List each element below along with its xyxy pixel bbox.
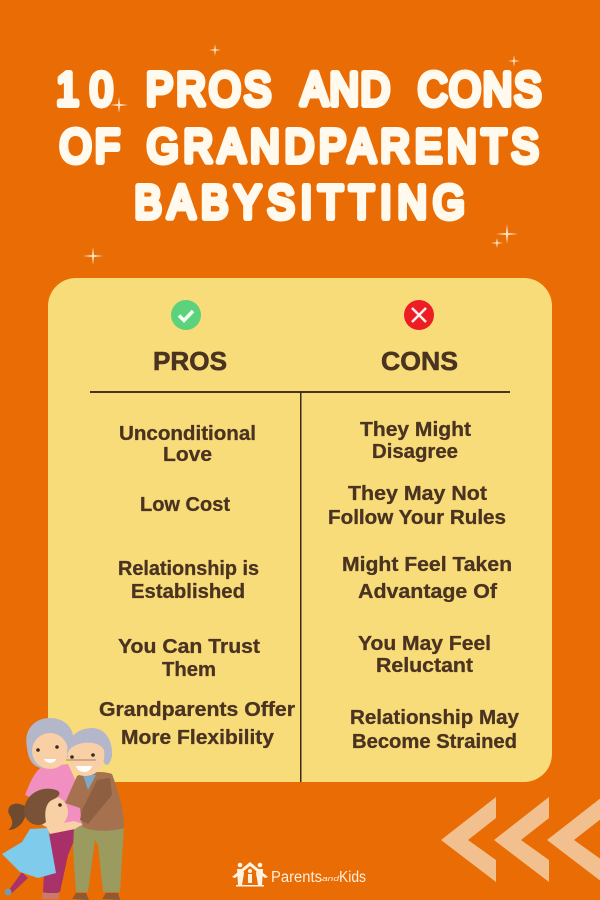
con 2: Follow Your Rules <box>328 507 506 529</box>
grandpa jacket <box>65 772 124 831</box>
con 3: Might Feel Taken <box>342 554 512 576</box>
con 1 <box>360 419 471 463</box>
cons list <box>328 419 520 753</box>
pro 5: Grandparents Offer <box>99 699 295 721</box>
icon: red cross <box>404 300 434 330</box>
grandpa collar <box>83 775 96 790</box>
pro 2: Low Cost <box>140 494 230 516</box>
illustration: grandparents hugging child <box>2 718 124 900</box>
pro 3 <box>118 558 259 603</box>
logo: Parents and Kids <box>232 862 366 886</box>
heading: pros: PROS <box>153 346 227 376</box>
con 3 <box>342 554 512 603</box>
pro 1 <box>119 423 256 466</box>
title: GRANDPARENTS <box>147 122 539 173</box>
pro 5 <box>99 699 295 749</box>
grandma body <box>25 764 82 830</box>
con 4 <box>358 633 491 677</box>
logo: Parents and Kids: Kids <box>339 869 366 886</box>
pros list <box>99 423 295 749</box>
grandma legs <box>45 826 80 892</box>
panel: pros and cons table <box>48 278 552 782</box>
logo: Parents and Kids: and <box>322 876 341 883</box>
con 2: They May Not <box>348 483 487 505</box>
child dress <box>2 828 56 878</box>
grandpa hair <box>67 728 112 765</box>
grandma smile <box>44 759 56 763</box>
pro 5: More Flexibility <box>121 727 275 749</box>
con 2 <box>328 483 506 529</box>
grandpa arm <box>80 778 112 824</box>
icon: house with family <box>232 862 268 886</box>
grandpa trousers <box>73 826 124 892</box>
pro 3: Established <box>131 581 245 603</box>
child face <box>36 796 68 828</box>
icon: green check <box>171 300 201 330</box>
child arm <box>46 821 83 834</box>
con 3: Advantage Of <box>358 581 497 603</box>
pro 3: Relationship is <box>118 558 259 580</box>
grandpa face <box>68 743 104 776</box>
pro 4: You Can Trust <box>118 636 260 658</box>
pro 4: Them <box>162 659 216 681</box>
con 5: Become Strained <box>352 731 517 753</box>
title: PROS <box>146 65 271 116</box>
sparkles <box>83 44 520 265</box>
title: 10 <box>56 65 113 116</box>
title: BABYSITTING <box>135 178 465 229</box>
logo text: Parents <box>271 869 322 886</box>
title: AND <box>301 65 390 116</box>
arrows: decorative chevrons <box>441 797 600 882</box>
con 1: They Might <box>360 419 471 441</box>
con 4: Reluctant <box>376 655 473 677</box>
title: OF <box>60 122 120 173</box>
child legs <box>9 872 60 895</box>
child ponytail <box>8 804 26 830</box>
heading: cons: CONS <box>381 346 458 376</box>
con 5 <box>350 707 520 753</box>
con 4: You May Feel <box>358 633 491 655</box>
title: CONS <box>418 65 541 116</box>
grandma face <box>32 733 68 769</box>
pro 1: Unconditional <box>119 423 256 445</box>
con 1: Disagree <box>372 441 458 463</box>
child hair <box>24 789 59 825</box>
pro 1: Love <box>163 444 212 466</box>
grandpa shoes <box>72 893 120 900</box>
con 5: Relationship May <box>350 707 520 729</box>
grandpa smile <box>76 766 92 772</box>
pro 4 <box>118 636 260 681</box>
grandma hair <box>26 718 74 768</box>
title <box>56 65 541 229</box>
